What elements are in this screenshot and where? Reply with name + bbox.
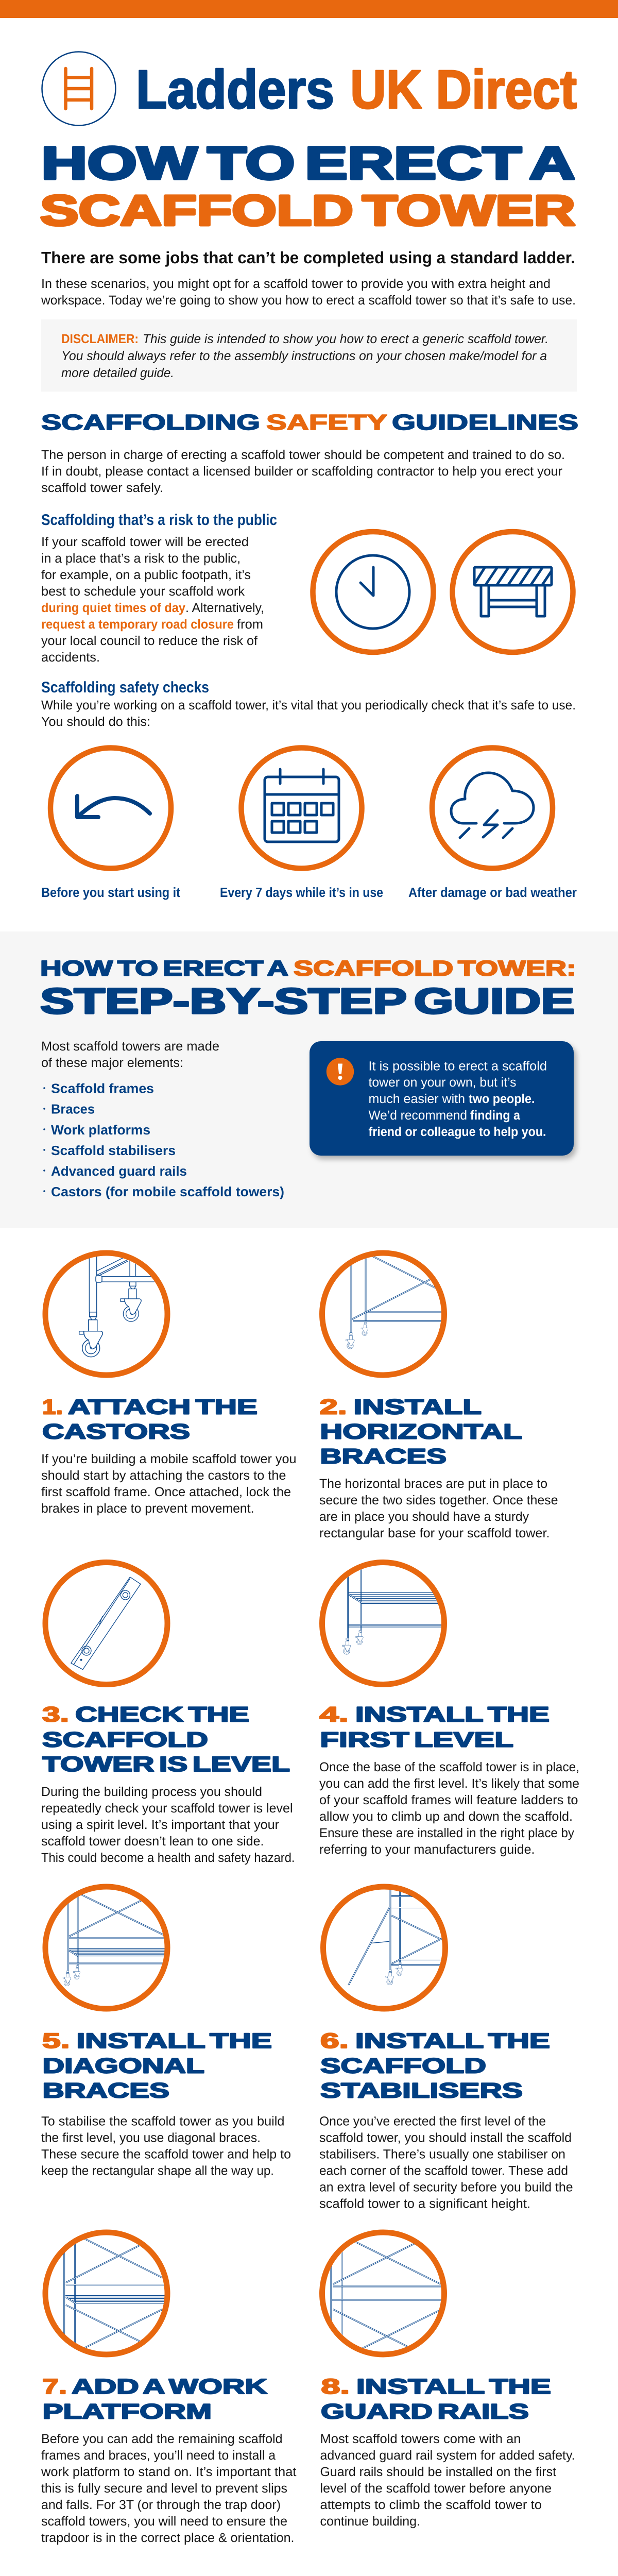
heading and text: safety checks: Scaffolding safety checks (41, 679, 209, 696)
body text: stabilisers. There’s usually one stabiliser on (319, 2147, 565, 2162)
check: before you start (41, 748, 180, 900)
text: risk to the public: If your scaffold tower will be erected (41, 535, 249, 549)
heading: step-by-step guide: SCAFFOLD TOWER: (294, 956, 576, 980)
body text: Ensure these are installed in the right place by (319, 1826, 574, 1840)
body text: the first level, you use diagonal braces. (41, 2131, 261, 2145)
title (40, 138, 575, 234)
heading: step-by-step guide (40, 956, 576, 1021)
list: elements: Braces (51, 1101, 95, 1117)
step 8: install the guard rails (320, 2231, 575, 2529)
check: after bad weather (408, 748, 577, 900)
heading (42, 1395, 258, 1444)
text: risk to the public: for example, on a public footpath, it’s (41, 568, 251, 582)
heading: 2. (319, 1395, 347, 1419)
body text: To stabilise the scaffold tower as you build (41, 2114, 284, 2129)
text: risk to the public: in a place that’s a risk to the public, (41, 551, 241, 566)
heading: 4. (319, 1702, 348, 1726)
heading and text: safety checks: You should do this: (41, 715, 150, 729)
icon: exclamation (327, 1058, 354, 1086)
body text: Once you’ve erected the first level of the (319, 2114, 546, 2129)
illustration: castors (45, 1249, 167, 1375)
text: competence paragraph: The person in charge of erecting a scaffold tower should be competent and trained to do so. (41, 448, 565, 462)
body text: secure the two sides together. Once these (319, 1493, 558, 1507)
body text (41, 1452, 297, 1516)
heading (319, 1702, 550, 1752)
panel: disclaimer: This guide is intended to show you how to erect a generic scaffold tower. (143, 332, 548, 346)
intro text: There are some jobs that can’t be completed using a standard ladder. (41, 248, 575, 267)
callout: two people: much easier with (369, 1092, 465, 1106)
body text: attempts to climb the scaffold tower to (320, 2498, 542, 2512)
heading: HORIZONTAL (320, 1420, 522, 1444)
heading: 8. (321, 2375, 350, 2398)
heading: 6. (320, 2029, 349, 2053)
icon: return arrow (50, 748, 171, 869)
text: major elements: of these major elements: (41, 1056, 183, 1070)
body text: rectangular base for your scaffold tower. (319, 1526, 550, 1540)
body text: If you’re building a mobile scaffold tower you (41, 1452, 297, 1466)
icon: calendar (241, 748, 362, 869)
logo wordmark: UK Direct (350, 59, 577, 120)
text: risk to the public: your local council to reduce the risk of (41, 634, 258, 648)
intro text (41, 248, 576, 308)
illustration: diagonal braces (45, 1886, 167, 2009)
heading: step-by-step guide: HOW TO ERECT A (40, 956, 288, 980)
text: risk to the public (41, 535, 264, 665)
text: competence paragraph: scaffold tower safely. (41, 481, 163, 495)
panel: disclaimer: You should always refer to the assembly instructions on your chosen make/model for a (61, 349, 547, 363)
check: every 7 days: Every 7 days while it’s in use (220, 885, 383, 900)
text: risk to the public: accidents. (41, 650, 100, 665)
heading and text: safety checks (41, 679, 576, 729)
heading (321, 2375, 551, 2424)
body text: brakes in place to prevent movement. (41, 1501, 254, 1516)
list: elements (43, 1081, 284, 1199)
body text: advanced guard rail system for added safety. (320, 2448, 575, 2463)
body text: scaffold tower doesn’t lean to one side. (41, 1834, 264, 1849)
body text: scaffold tower to a significant height. (319, 2197, 530, 2211)
heading: INSTALL THE (356, 2375, 551, 2398)
body text: Most scaffold towers come with an (320, 2432, 521, 2446)
body text: During the building process you should (41, 1785, 262, 1799)
heading: 7. (42, 2375, 67, 2398)
heading: step-by-step guide: STEP-BY-STEP GUIDE (40, 981, 575, 1021)
heading: SCAFFOLD (42, 1728, 208, 1752)
body text: work platform to stand on. It’s important that (41, 2465, 297, 2479)
body text: The horizontal braces are put in place to (319, 1477, 547, 1491)
list: elements: Scaffold frames (51, 1081, 154, 1096)
body text (41, 1785, 295, 1865)
body text: allow you to climb up and down the scaffold. (319, 1809, 573, 1824)
icon: ladder in circle (42, 52, 115, 126)
callout: two people: two people. (469, 1092, 535, 1106)
illustration: horizontal braces (322, 1249, 447, 1375)
heading: STABILISERS (320, 2078, 523, 2102)
body text: of your scaffold frames will feature ladders to (319, 1793, 578, 1807)
heading: PLATFORM (42, 2400, 212, 2424)
body text: and falls. For 3T (or through the trap door) (41, 2498, 281, 2512)
callout: two people: friend or colleague to help you. (369, 1125, 546, 1139)
heading: scaffolding safety guidelines: SAFETY (266, 410, 387, 434)
text: risk to the public: during quiet times of day (41, 601, 185, 615)
heading: 1. (42, 1395, 63, 1419)
check: every 7 days (220, 748, 383, 900)
body text (319, 2114, 573, 2211)
heading: TOWER IS LEVEL (42, 1752, 290, 1776)
body text: this is fully secure and level to prevent slips (41, 2481, 287, 2496)
heading (319, 1395, 522, 1468)
illustration: work platform (45, 2231, 167, 2357)
body text: scaffold towers, you will need to ensure the (41, 2514, 287, 2529)
text: competence paragraph: If in doubt, please contact a licensed builder or scaffolding contractor to help you erect your (41, 464, 562, 479)
illustration: stabilisers (323, 1886, 445, 2009)
body text (319, 1760, 579, 1857)
text: risk to the public: best to schedule your scaffold work (41, 584, 245, 599)
heading: 5. (42, 2029, 70, 2053)
heading: scaffolding safety guidelines: GUIDELINES (392, 410, 578, 434)
heading: DIAGONAL (42, 2054, 204, 2077)
body text: This could become a health and safety hazard. (41, 1851, 295, 1865)
heading (42, 2375, 268, 2424)
body text: first scaffold frame. Once attached, lock the (41, 1485, 291, 1499)
list: elements: Scaffold stabilisers (51, 1143, 176, 1158)
panel: disclaimer (41, 319, 577, 392)
heading and text: safety checks: While you’re working on a scaffold tower, it’s vital that you periodically check that it’s safe to use. (41, 698, 576, 713)
body text: should start by attaching the castors to the (41, 1468, 286, 1483)
title: SCAFFOLD TOWER (40, 187, 575, 234)
icon: clock (313, 532, 434, 652)
text: competence paragraph (41, 448, 565, 495)
body text: Guard rails should be installed on the first (320, 2465, 556, 2479)
heading: INSTALL (353, 1395, 482, 1419)
logo wordmark: Ladders (136, 59, 334, 120)
check: after bad weather: After damage or bad weather (408, 885, 577, 900)
list: elements: Advanced guard rails (51, 1163, 187, 1179)
illustration: spirit level (45, 1562, 167, 1685)
heading (42, 1702, 290, 1776)
heading: INSTALL THE (355, 2029, 550, 2053)
body text: trapdoor is in the correct place & orientation. (41, 2531, 295, 2545)
body text (41, 2114, 291, 2178)
body text: scaffold tower, you should install the scaffold (319, 2131, 572, 2145)
panel: disclaimer: more detailed guide. (61, 366, 174, 380)
step 3: check the tower is level (41, 1562, 295, 1865)
body text: using a spirit level. It’s important that your (41, 1818, 279, 1832)
callout: two people: tower on your own, but it’s (369, 1075, 516, 1090)
body text: keep the rectangular shape all the way up. (41, 2164, 274, 2178)
heading: BRACES (320, 1445, 447, 1468)
heading: INSTALL THE (355, 1702, 550, 1726)
list: elements: Castors (for mobile scaffold towers) (51, 1184, 284, 1199)
logo: Ladders UK Direct (42, 52, 577, 126)
text: risk to the public: from (237, 617, 263, 632)
step 2: install horizontal braces (319, 1249, 558, 1540)
body text: referring to your manufacturers guide. (319, 1842, 535, 1857)
step 4: install the first level (319, 1558, 579, 1857)
callout: two people: finding a (470, 1108, 521, 1123)
icon: road barrier (452, 532, 573, 652)
body text: continue building. (320, 2514, 420, 2529)
heading: CHECK THE (75, 1702, 249, 1726)
body text: repeatedly check your scaffold tower is level (41, 1801, 293, 1816)
heading: INSTALL THE (76, 2029, 272, 2053)
step 5: install the diagonal braces (41, 1886, 291, 2178)
body text: frames and braces, you’ll need to install a (41, 2448, 276, 2463)
text: risk to the public: . Alternatively, (185, 601, 264, 615)
body text: level of the scaffold tower before anyone (320, 2481, 552, 2496)
heading: scaffolding safety guidelines: SCAFFOLDING (41, 410, 260, 434)
body text: you can add the first level. It’s likely that some (319, 1776, 579, 1791)
heading: BRACES (42, 2078, 169, 2102)
check: before you start: Before you start using it (41, 885, 180, 900)
panel: disclaimer: DISCLAIMER: (61, 332, 139, 346)
body text: These secure the scaffold tower and help to (41, 2147, 291, 2162)
heading: scaffolding risk to the public: Scaffolding that’s a risk to the public (41, 512, 277, 529)
body text (41, 2432, 297, 2545)
intro text: workspace. Today we’re going to show you how to erect a scaffold tower so that it’s safe to use. (41, 293, 576, 308)
heading: SCAFFOLD (320, 2054, 486, 2077)
heading: ATTACH THE (68, 1395, 258, 1419)
step 1: attach the castors (41, 1249, 297, 1516)
intro text: In these scenarios, you might opt for a scaffold tower to provide you with extra height and (41, 277, 551, 291)
list: elements: Work platforms (51, 1122, 150, 1138)
body text (319, 1477, 558, 1540)
panel: step-by-step guide (0, 931, 618, 1228)
text: major elements (41, 1039, 219, 1070)
callout: two people: We’d recommend (369, 1108, 467, 1123)
top orange bar (0, 0, 618, 18)
callout: two people: It is possible to erect a scaffold (369, 1059, 547, 1074)
heading: FIRST LEVEL (320, 1728, 513, 1752)
heading: scaffolding safety guidelines (41, 410, 578, 434)
text: major elements: Most scaffold towers are made (41, 1039, 219, 1054)
body text: Before you can add the remaining scaffold (41, 2432, 282, 2446)
step 6: install the scaffold stabilisers (319, 1886, 573, 2211)
callout: two people (310, 1041, 574, 1156)
illustration: guard rails (322, 2231, 445, 2357)
heading: GUARD RAILS (321, 2400, 529, 2424)
heading: 3. (42, 1702, 69, 1726)
body text: each corner of the scaffold tower. These add (319, 2164, 568, 2178)
body text (320, 2432, 575, 2529)
icon: storm cloud (432, 748, 553, 869)
heading: ADD A WORK (72, 2375, 268, 2398)
body text: Once the base of the scaffold tower is in place, (319, 1760, 579, 1774)
title: HOW TO ERECT A (41, 138, 575, 190)
illustration: first level (322, 1558, 448, 1685)
logo wordmark (136, 59, 577, 120)
heading (42, 2029, 272, 2102)
heading (320, 2029, 550, 2102)
heading: CASTORS (42, 1420, 190, 1444)
step 7: add a work platform (41, 2231, 297, 2545)
body text: an extra level of security before you build the (319, 2180, 573, 2195)
text: risk to the public: request a temporary road closure (41, 617, 234, 632)
body text: are in place you should have a sturdy (319, 1510, 529, 1524)
